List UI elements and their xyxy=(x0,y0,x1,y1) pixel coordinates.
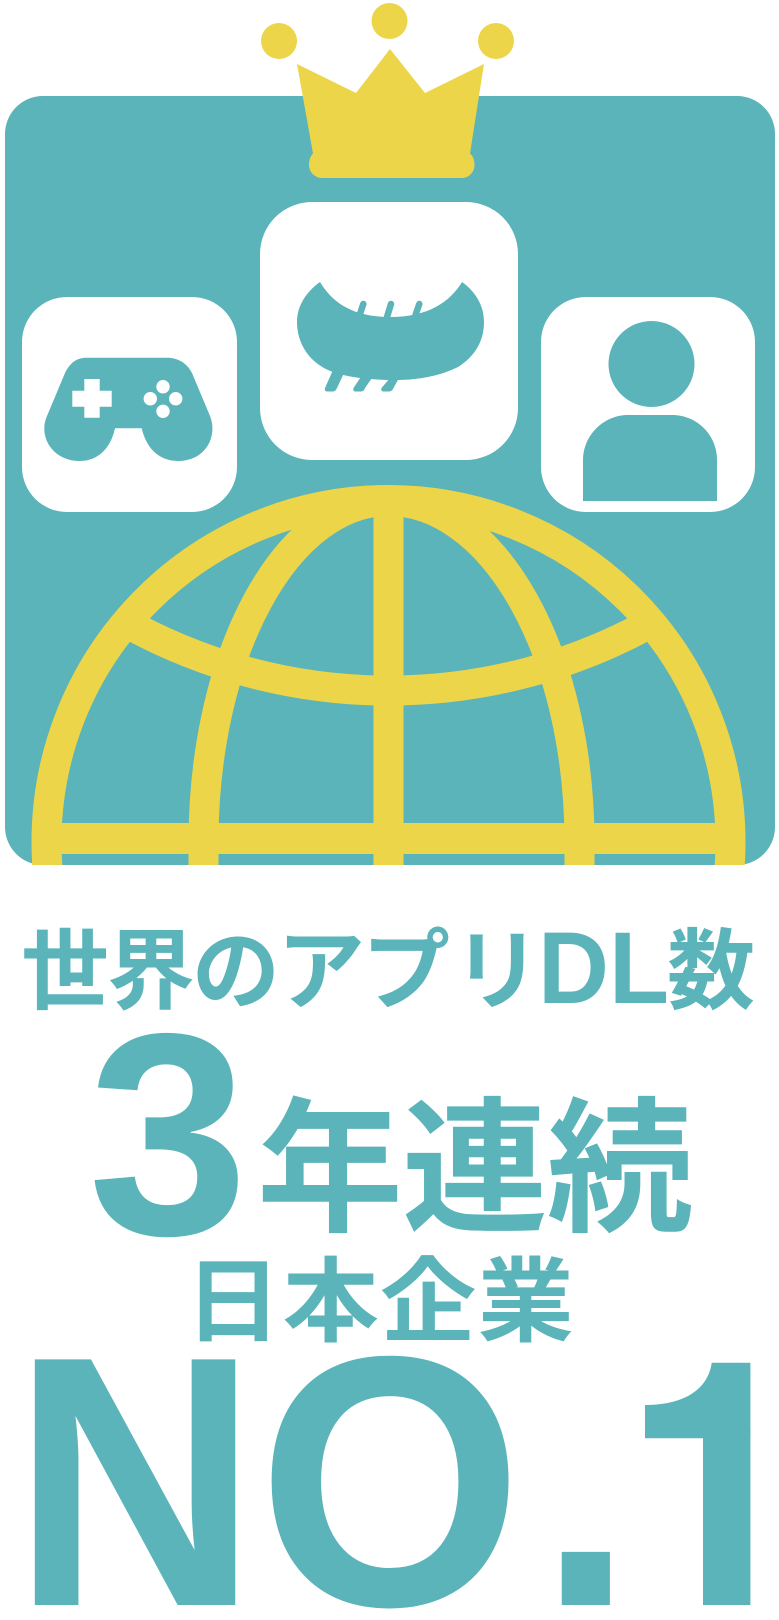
icon: crown xyxy=(261,3,514,178)
heading: Japanese company: 日本企業 xyxy=(185,1251,574,1354)
heading: consecutive years: 年連続 xyxy=(257,1088,693,1251)
heading: world app downloads: 世界のアプリ xyxy=(21,922,541,1021)
icon card: game controller xyxy=(22,297,237,512)
icon card: app xyxy=(260,202,518,460)
number: 3: 3 xyxy=(88,974,248,1296)
heading: world app downloads: DL xyxy=(538,911,669,1025)
icon card: person xyxy=(541,297,755,512)
panel: teal background xyxy=(5,96,775,865)
heading: world app downloads xyxy=(21,911,755,1025)
icon: globe xyxy=(32,485,746,865)
headline: NO.1 xyxy=(34,1356,750,1608)
heading: world app downloads: 数 xyxy=(667,922,755,1021)
